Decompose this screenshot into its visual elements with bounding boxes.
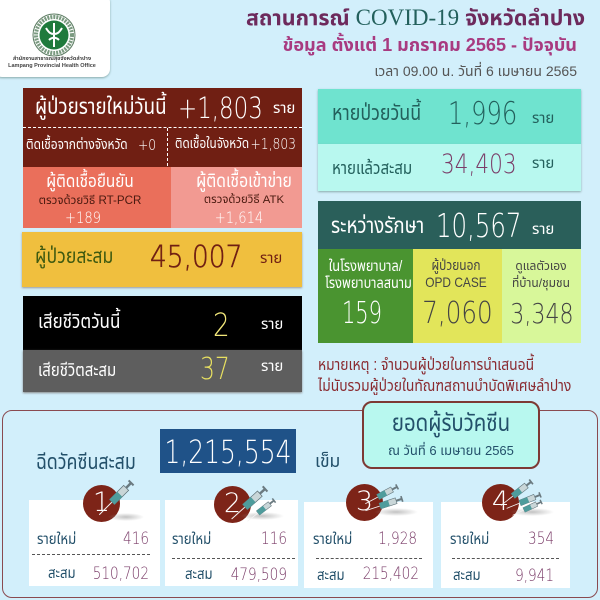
RT-PCR method: ตรวจด้วยวิธี RT-PCR: [39, 194, 141, 207]
home label: [512, 259, 570, 290]
panel: OPD: [413, 249, 502, 343]
RT-PCR heading: ผู้ติดเชื้อยืนยัน: [46, 171, 134, 191]
badge: dose 4: [482, 484, 519, 521]
title: สถานการณ์ COVID-19 จังหวัดลำปาง: [246, 5, 585, 30]
dose 4 total label: สะสม: [453, 567, 481, 584]
dose 4 numeral: 4: [492, 486, 509, 517]
hospital label: [325, 258, 412, 292]
card: dose 3: [304, 502, 433, 588]
panel: home isolation: [502, 249, 581, 343]
new cases unit: ราย: [273, 100, 295, 117]
dose 3 total label: สะสม: [317, 567, 345, 584]
new cases heading: ผู้ป่วยรายใหม่วันนี้: [35, 94, 167, 119]
recovered total number: 34,403: [441, 149, 517, 180]
panel: vaccine: [2, 410, 598, 598]
home label: ที่บ้าน/ชุมชน: [512, 276, 570, 290]
new cases number: +1,803: [178, 91, 263, 125]
deaths total number: 37: [200, 352, 230, 387]
OPD number: 7,060: [422, 296, 493, 331]
local cases: ติดเชื้อในจังหวัด: [175, 136, 249, 151]
logo card: [0, 0, 110, 77]
badge: dose 3: [346, 484, 383, 521]
dose 1 new label: รายใหม่: [37, 531, 76, 548]
OPD label: [425, 257, 487, 290]
recovered number: 1,996: [448, 96, 517, 132]
hospital number: 159: [342, 296, 382, 331]
note: [318, 354, 571, 395]
dose 4 new label: รายใหม่: [450, 531, 489, 548]
recovered label: หายป่วยวันนี้: [332, 102, 421, 125]
deaths today label: เสียชีวิตวันนี้: [38, 311, 120, 333]
vaccine total number: 1,215,554: [164, 433, 292, 471]
treatment label: ระหว่างรักษา: [331, 213, 424, 238]
panel: deaths total: [23, 350, 302, 392]
dose 3 new value: 1,928: [378, 529, 417, 549]
dose 2 new value: 116: [261, 529, 287, 549]
home label: ดูแลตัวเอง: [515, 259, 567, 273]
card: dose 4: [441, 502, 570, 588]
cumulative label: ผู้ป่วยสะสม: [35, 245, 113, 268]
dose 1 numeral: 1: [93, 487, 110, 518]
home number: 3,348: [510, 297, 574, 330]
date line: เวลา 09.00 น. วันที่ 6 เมษายน 2565: [374, 63, 577, 79]
panel: hospital: [318, 249, 413, 343]
note: หมายเหตุ : จำนวนผู้ป่วยในการนำเสนอนี้: [318, 356, 534, 374]
dose 4 total value: 9,941: [515, 566, 554, 586]
dose 3 new label: รายใหม่: [313, 531, 352, 548]
cumulative unit: ราย: [260, 250, 282, 267]
recovered unit: ราย: [532, 110, 554, 127]
dose 1 total value: 510,702: [93, 564, 149, 584]
treatment unit: ราย: [532, 221, 554, 238]
dose 2 total label: สะสม: [185, 566, 213, 583]
OPD label: ผู้ป่วยนอก: [431, 257, 481, 273]
hospital label: โรงพยาบาลสนาม: [325, 275, 412, 292]
RT-PCR value: +189: [65, 208, 101, 227]
deaths total label: เสียชีวิตสะสม: [38, 360, 116, 380]
panel: recovered today: [318, 89, 581, 144]
panel: recovered total: [318, 144, 581, 191]
vaccine date: ณ วันที่ 6 เมษายน 2565: [388, 443, 514, 458]
treatment number: 10,567: [436, 206, 521, 245]
card: dose 1: [29, 500, 160, 586]
vaccine total label: ฉีดวัคซีนสะสม: [36, 451, 136, 474]
panel: RT-PCR: [23, 167, 171, 228]
dose 2 total value: 479,509: [231, 565, 287, 585]
card: dose 2: [165, 500, 298, 586]
dose 3 numeral: 3: [356, 486, 373, 517]
badge: dose 1: [83, 485, 120, 522]
panel: cumulative cases: [22, 232, 302, 287]
panel: new cases: [23, 88, 302, 167]
dose 2 numeral: 2: [224, 488, 241, 519]
vaccine total unit: เข็ม: [315, 451, 340, 471]
ATK value: +1,614: [215, 208, 263, 227]
recovered total unit: ราย: [532, 155, 554, 172]
dose 1 total label: สะสม: [48, 565, 76, 582]
icon: ministry seal: [32, 14, 76, 56]
dose 4 new value: 354: [528, 529, 554, 549]
dose 3 total value: 215,402: [363, 564, 419, 584]
imported cases: ติดเชื้อจากต่างจังหวัด: [26, 136, 128, 152]
subtitle: ข้อมูล ตั้งแต่ 1 มกราคม 2565 - ปัจจุบัน: [283, 35, 577, 55]
local value: +1,803: [250, 135, 296, 153]
imported value: +0: [138, 136, 156, 154]
vaccine total box: [160, 429, 296, 473]
dose 2 new label: รายใหม่: [172, 531, 211, 548]
vaccine heading box: [362, 401, 540, 469]
logo text: Lampang Provincial Health Office: [8, 63, 96, 69]
vaccine heading: ยอดผู้รับวัคซีน: [392, 410, 510, 437]
deaths total unit: ราย: [261, 358, 283, 375]
deaths today unit: ราย: [261, 316, 283, 333]
panel: ATK: [171, 167, 302, 228]
cumulative number: 45,007: [150, 240, 242, 275]
badge: dose 2: [214, 486, 251, 523]
panel: under treatment: [318, 201, 581, 249]
recovered total label: หายแล้วสะสม: [332, 158, 412, 178]
ATK method: ตรวจด้วยวิธี ATK: [204, 194, 284, 206]
note: ไม่นับรวมผู้ป่วยในทัณฑสถานบำบัดพิเศษลำปาง: [318, 377, 571, 395]
panel: deaths today: [23, 296, 302, 350]
logo text: [8, 56, 96, 69]
deaths today number: 2: [213, 306, 230, 344]
dose 1 new value: 416: [123, 529, 149, 549]
logo text: สำนักงานสาธารณสุขจังหวัดลำปาง: [13, 56, 91, 62]
hospital label: ในโรงพยาบาล/: [329, 258, 402, 275]
ATK heading: ผู้ติดเชื้อเข้าข่าย: [196, 170, 292, 191]
OPD label: OPD CASE: [425, 274, 487, 290]
